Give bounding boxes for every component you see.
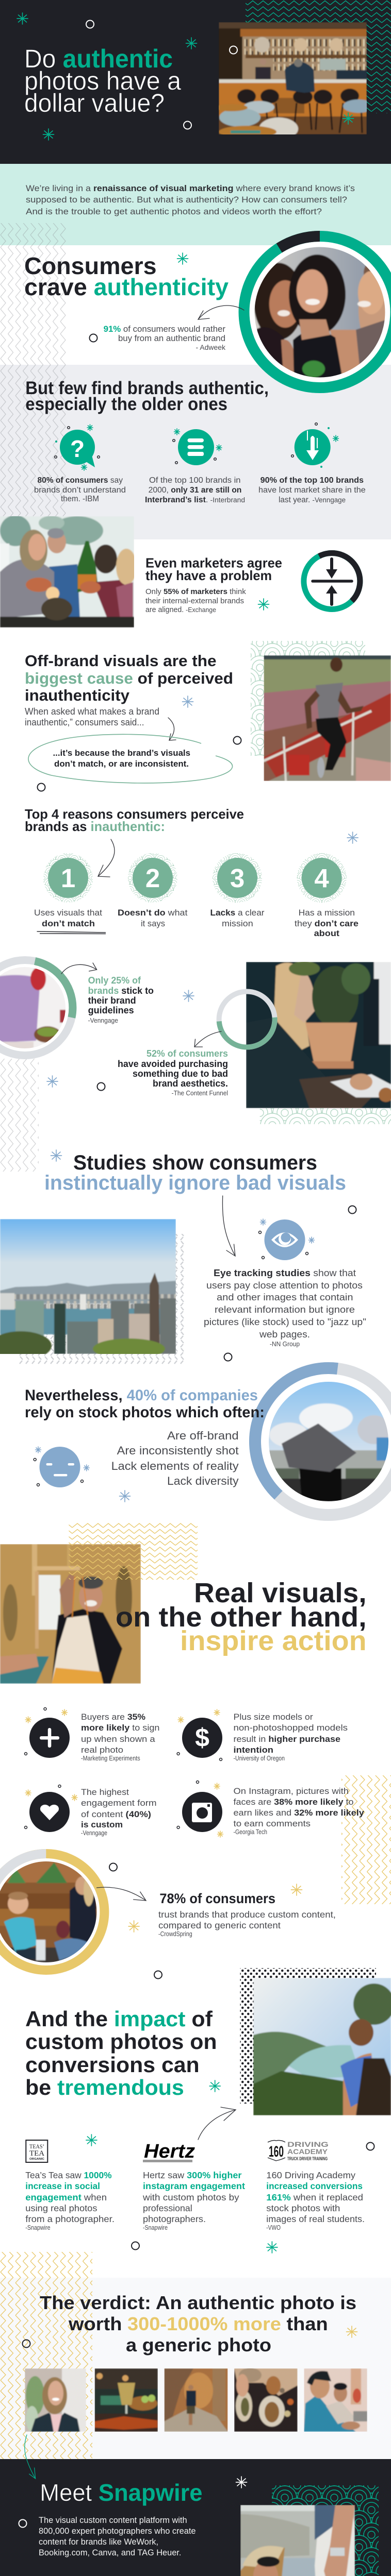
logo: 160 Driving Academy (268, 2140, 329, 2161)
icon: blue asterisk (183, 696, 193, 707)
icon: rings (37, 737, 241, 791)
stat: 90% of top brands: last year. -Venngage (279, 496, 346, 504)
stat: only 31 (145, 476, 245, 504)
photo: mother and son (0, 1860, 98, 1963)
list of stock photo problems (111, 1429, 239, 1487)
donut chart 25% with photo (0, 956, 76, 1059)
reason 4: about (314, 929, 340, 938)
gray section background (0, 365, 391, 539)
heading: Off-brand visuals are the (25, 652, 217, 670)
photo: person with umbrella (268, 1381, 390, 1502)
photo: purple smoothie (0, 963, 67, 1051)
heading: they have a problem (145, 568, 272, 583)
callout: hand-drawn ellipse: don’t match, or are inconsistent. (54, 759, 189, 769)
photo: tacos on table (234, 2368, 298, 2432)
case: Hertz: photographers. (143, 2214, 206, 2224)
eye tracking text: users pay close attention to photos (206, 1280, 363, 1291)
list of stock photo problems: Are off-brand (167, 1429, 239, 1442)
heading (40, 2292, 356, 2355)
stat: 80% of consumers (34, 476, 126, 503)
heading: inspire action (180, 1625, 367, 1656)
stat: faces on Instagram: to earn comments (233, 1819, 311, 1828)
reason 1: Uses visuals that (34, 908, 102, 918)
case: Hertz (142, 2170, 245, 2231)
callout: hand-drawn ellipse: ...it’s because the brand’s visuals (53, 748, 190, 758)
reason 2: Doesn’t do what (118, 908, 188, 918)
case: 160 Driving Academy: 160 Driving Academy (266, 2170, 355, 2180)
stat: 90% of top brands: have lost market share in the (258, 486, 366, 495)
icon: ring (90, 334, 97, 342)
case: Hertz: instagram engagement (143, 2181, 245, 2191)
heading: crave authenticity (24, 274, 229, 300)
donut chart 78% with photo (0, 1849, 109, 1975)
reason 2: it says (141, 919, 165, 928)
section: consumers crave authenticity (25, 231, 391, 393)
description text: Booking.com, Canva, and TAG Heuer. (39, 2548, 181, 2557)
case: 160 Driving Academy (266, 2170, 365, 2231)
case: Teas' Tea (25, 2170, 115, 2231)
zigzag pattern (69, 1522, 198, 1580)
heading: brands as inauthentic: (25, 819, 165, 834)
stat: only 31: Interbrand’s list. -Interbrand (145, 496, 245, 504)
icons: asterisk and ring (23, 2326, 357, 2347)
eye tracking text: relevant information but ignore (215, 1304, 355, 1315)
stat: 25% of brands: Only 25% of (88, 975, 141, 986)
logo: Teas' Tea (26, 2140, 47, 2162)
stat: 91%: 91% of consumers would rather (104, 324, 225, 334)
logo: 160 Driving Academy: 160 (269, 2143, 284, 2160)
reason 3: 3 (230, 863, 245, 893)
photo: hiker above bay (253, 1978, 391, 2115)
stat: 55% of marketers: their internal-external brands (145, 597, 244, 605)
icon: heart (25, 1785, 77, 1832)
case: 160 Driving Academy: images of real students. (266, 2214, 365, 2224)
stat: 55% of marketers: Only 55% of marketers think (145, 587, 246, 596)
heading: Top 4 reasons consumers perceive (25, 806, 244, 822)
section: 78% of consumers (0, 1844, 336, 1980)
heading: instinctually ignore bad visuals (44, 1172, 346, 1194)
stat: 78% of consumers: -CrowdSpring (158, 1930, 192, 1938)
photo: craftsman with apron (0, 1544, 141, 1684)
stat: only 31: Of the top 100 brands in (149, 476, 240, 485)
stat: 90% of top brands: 90% of the top 100 brands (260, 476, 364, 485)
logo: 160 Driving Academy: ACADEMY (287, 2147, 328, 2156)
heading: Studies show consumers (73, 1151, 317, 1174)
logo: 160 Driving Academy: TRUCK DRIVER TRAINING (287, 2156, 328, 2161)
section: real visuals (0, 1522, 391, 1904)
stat: 80% of consumers: them. -IBM (61, 495, 99, 503)
stat: plus size models: -University of Oregon (233, 1755, 285, 1762)
heading: The verdict: An authentic photo is (40, 2292, 356, 2313)
zigzag pattern (246, 0, 391, 113)
stat: 91% (104, 324, 226, 351)
eye tracking text: and other images that contain (217, 1292, 353, 1302)
heading: worth 300-1000% more than (68, 2313, 328, 2334)
stat: 35% more likely: up when shown a (81, 1734, 155, 1744)
heading: rely on stock photos which often: (25, 1404, 265, 1421)
stat: 55% of marketers: are aligned. -Exchange (145, 605, 216, 614)
icons: yellow asterisks (128, 1884, 302, 1932)
photo: businesswoman (25, 2368, 86, 2432)
icons: asterisks and rings (86, 2134, 374, 2253)
stripe pattern (18, 1234, 185, 1364)
stat: faces on Instagram (233, 1786, 364, 1836)
stat: custom content: is custom (81, 1820, 123, 1829)
stat: custom content: The highest (81, 1787, 129, 1797)
heading: custom photos on (25, 2029, 217, 2054)
stat: 52% of consumers: 52% of consumers (146, 1048, 228, 1059)
case: Teas' Tea: engagement when (25, 2192, 107, 2202)
section: marketers problem (0, 515, 370, 628)
icons: asterisks and ring (47, 990, 194, 1090)
icon: teal asterisk (209, 2080, 220, 2092)
arrow (198, 306, 244, 319)
arrow (168, 718, 176, 740)
eye tracking text: -NN Group (270, 1340, 300, 1348)
stat: 91%: - Adweek (196, 343, 226, 351)
stat: 35% more likely: real photo (81, 1745, 123, 1755)
section: intro (0, 164, 391, 245)
stat: 25% of brands: their brand (88, 995, 136, 1006)
icon: teal asterisk (177, 253, 188, 264)
reason 4: Has a mission (299, 908, 355, 918)
case: 160 Driving Academy: stock photos with (266, 2203, 340, 2213)
stat: 90% of top brands (258, 476, 366, 504)
case: Teas' Tea: from a photographer. (25, 2214, 115, 2224)
arrow (61, 963, 97, 974)
stat: 52% of consumers: brand aesthetics. (153, 1078, 228, 1089)
heading (25, 806, 244, 834)
donut chart 52% (217, 990, 276, 1049)
stat: 25% of brands: brands stick to (88, 986, 154, 996)
logo: Teas' Tea: TEA (29, 2149, 44, 2158)
photo: three smiling women (253, 245, 391, 381)
heading (25, 378, 269, 414)
photo: runner on stadium stairs (264, 655, 391, 781)
eye tracking text (204, 1268, 366, 1348)
heading (25, 2007, 217, 2099)
description text: content for brands like WeWork, (39, 2537, 158, 2547)
reason 1: don’t match (42, 919, 95, 928)
intro text: We’re living in a renaissance of visual marketing where every brand knows it’s (26, 183, 355, 193)
case: Teas' Tea: using real photos (25, 2203, 97, 2213)
heading: Consumers (24, 252, 157, 279)
callout: hand-drawn ellipse (28, 734, 233, 783)
description text: 800,000 expert photographers who create (39, 2526, 196, 2536)
icon: blue asterisk (120, 1490, 130, 1502)
heading: conversions can (25, 2053, 200, 2077)
icon: speech bubble question (55, 425, 100, 470)
reason 3: mission (222, 919, 253, 928)
scallop pattern (260, 1108, 391, 1124)
heading: But few find brands authentic, (25, 378, 269, 398)
heading: especially the older ones (25, 394, 227, 414)
case: 160 Driving Academy: 161% when it replaced (266, 2192, 363, 2202)
donut chart 40% with photo (249, 1362, 391, 1521)
heading (25, 1387, 265, 1421)
intro text: And is the trouble to get authentic photos and videos worth the effort? (26, 207, 322, 216)
reason 1 (34, 853, 106, 934)
icon: instagram (177, 1781, 223, 1837)
scallop pattern (272, 2485, 379, 2576)
stat: 35% more likely: more likely to sign (81, 1723, 159, 1733)
section: hero (0, 0, 391, 164)
photo: friends with sparklers (0, 515, 137, 628)
case: Hertz: professional (143, 2203, 192, 2213)
arrow (25, 2435, 36, 2479)
donut chart 55% with arrows (294, 544, 370, 619)
heading: Real visuals, (194, 1578, 367, 1608)
heading: biggest cause of perceived (25, 669, 233, 687)
icon: plus (25, 1707, 70, 1758)
title: Do authentic (24, 44, 173, 73)
logo: 160 Driving Academy: DRIVING (287, 2140, 329, 2148)
photo: woman with hat and basket (240, 2505, 355, 2576)
heading: on the other hand, (116, 1602, 367, 1633)
stat: only 31: 2000, only 31 are still on (149, 486, 241, 495)
stat: 52% of consumers (118, 1048, 228, 1097)
zigzag pattern (0, 1059, 39, 1172)
case: Teas' Tea: -Snapwire (25, 2224, 51, 2231)
reason 2 (118, 853, 188, 928)
arrow (194, 1031, 221, 1047)
stat: 78% of consumers: 78% of consumers (159, 1891, 275, 1906)
stat: 52% of consumers: something due to bad (133, 1069, 228, 1079)
stat: 55% of marketers (145, 587, 246, 614)
reason 4 (295, 853, 359, 938)
stat: custom content: engagement form (81, 1798, 157, 1808)
stat: plus size models (233, 1712, 348, 1762)
case: Hertz: with custom photos by (142, 2192, 239, 2202)
photo: woman with plant (246, 961, 391, 1108)
stat: 80% of consumers: 80% of consumers say (37, 476, 123, 485)
logo: Hertz: Hertz (144, 2141, 195, 2162)
stat: 52% of consumers: -The Content Funnel (172, 1089, 228, 1097)
reason 3: Lacks a clear (210, 908, 265, 918)
case: Hertz: -Snapwire (143, 2224, 168, 2231)
dot pattern (240, 1968, 376, 2104)
stat: 52% of consumers: have avoided purchasing (118, 1059, 228, 1069)
case: Teas' Tea: increase in social (25, 2181, 100, 2191)
reason 3 (210, 853, 265, 928)
photo: bar interior (219, 22, 367, 134)
heading: Nevertheless, 40% of companies (25, 1387, 258, 1404)
reason 2: 2 (145, 863, 160, 893)
section: impact on conversions (25, 1968, 391, 2253)
stat: 25% of brands: guidelines (88, 1005, 134, 1015)
stat: 80% of consumers: brands don’t understand (34, 486, 126, 495)
icon: rings (224, 1206, 356, 1361)
eye tracking text: Eye tracking studies show that (214, 1268, 356, 1278)
arrow (222, 1196, 235, 1256)
heading (145, 555, 282, 583)
photo: men at laptops (304, 2368, 367, 2432)
section: meet Snapwire (0, 2435, 391, 2576)
title (24, 44, 181, 117)
section: stock photos (25, 1338, 391, 1545)
heading (24, 252, 229, 300)
stat: 78% of consumers: compared to generic content (158, 1920, 281, 1930)
section: off-brand visuals (25, 641, 391, 791)
photo: harbour skyline (0, 1219, 176, 1360)
list of stock photo problems: Are inconsistently shot (117, 1444, 239, 1457)
stat: 78% of consumers (158, 1891, 336, 1938)
stat: 78% of consumers: trust brands that produce custom content, (158, 1909, 336, 1920)
left zigzag pattern (0, 223, 67, 516)
case: Teas' Tea: Tea’s Tea saw 1000% (25, 2170, 112, 2180)
case: 160 Driving Academy: -VWO (266, 2224, 281, 2231)
stat: 35% more likely: -Marketing Experiments (81, 1755, 140, 1762)
stat: 91%: buy from an authentic brand (118, 333, 225, 343)
stat: faces on Instagram: On Instagram, pictures with (233, 1786, 349, 1796)
section: verdict (0, 2252, 391, 2459)
scallop pattern (251, 641, 365, 756)
heading: a generic photo (126, 2334, 271, 2355)
icon: neutral face (34, 1447, 89, 1487)
heading: Even marketers agree (145, 555, 282, 571)
stat: 35% more likely: Buyers are 35% (81, 1712, 145, 1722)
stat: plus size models: non-photoshopped models (233, 1723, 348, 1733)
photo: drink with chilies (94, 2368, 158, 2432)
heading: Meet Snapwire (40, 2479, 203, 2506)
case: Hertz: Hertz saw 300% higher (143, 2170, 242, 2180)
logo: Teas' Tea: ORGANIC (29, 2158, 44, 2161)
stat: plus size models: Plus size models or (233, 1712, 313, 1722)
icon: speech bubble question: ? (70, 435, 85, 462)
stat: 35% more likely (81, 1712, 159, 1762)
intro sentence (25, 706, 159, 727)
icon: rings (109, 1863, 162, 1978)
section: studies (0, 1150, 366, 1364)
stat: plus size models: intention (233, 1745, 273, 1755)
icon: blue asterisk (51, 1150, 62, 1161)
list of stock photo problems: Lack diversity (167, 1475, 239, 1487)
icon: dollar (177, 1709, 222, 1761)
logo: Teas' Tea: TEAS’ (29, 2143, 44, 2150)
icon: list bars (173, 429, 222, 465)
list of stock photo problems: Lack elements of reality (111, 1460, 239, 1472)
reason 1: 1 (61, 863, 75, 893)
stat: 25% of brands: -Venngage (88, 1016, 118, 1024)
arrow (98, 839, 115, 877)
arrow (97, 1887, 146, 1901)
stat: faces on Instagram: -Georgia Tech (233, 1828, 267, 1836)
heading: And the impact of (25, 2007, 213, 2031)
case: 160 Driving Academy: increased conversions (266, 2181, 363, 2191)
heading: be tremendous (25, 2075, 184, 2099)
stat: faces on Instagram: earn likes and 32% more likely (233, 1808, 364, 1818)
photo: stone arches walker (164, 2368, 228, 2432)
decorative asterisks and rings (17, 13, 354, 140)
stat: faces on Instagram: faces are 38% more likely to (233, 1797, 354, 1807)
title: photos have a (24, 66, 181, 95)
icon: teal asterisk (258, 599, 269, 610)
stat: custom content: -Venngage (81, 1829, 107, 1837)
arrow (198, 2107, 236, 2140)
icons: asterisks and rings (19, 2477, 247, 2576)
eye tracking text: pictures (like stock) used to "jazz up" (204, 1317, 366, 1327)
heading (25, 652, 233, 704)
reason 4: 4 (314, 863, 329, 893)
intro sentence: When asked what makes a brand (25, 706, 159, 717)
stat: 25% of brands (88, 975, 154, 1024)
heading (116, 1578, 367, 1656)
intro text (26, 183, 355, 216)
stat: custom content: of content (40%) (81, 1809, 151, 1819)
description text (39, 2515, 196, 2557)
section: top 4 reasons (25, 806, 359, 938)
description text: The visual custom content platform with (39, 2515, 187, 2525)
heading (44, 1151, 346, 1194)
section: brand guidelines stats (0, 951, 391, 1172)
donut chart 91% with photo (238, 231, 391, 393)
eye tracking text: web pages. (259, 1329, 310, 1340)
reason 4: they don’t care (295, 919, 359, 928)
stat: custom content (81, 1787, 157, 1837)
icon: dollar: $ (195, 1723, 209, 1752)
intro sentence: inauthentic,” consumers said... (25, 717, 144, 727)
stat: plus size models: result in higher purchase (233, 1734, 340, 1744)
title: dollar value? (24, 89, 165, 117)
icon: eye (259, 1219, 315, 1260)
zigzag pattern (0, 2252, 92, 2459)
icon: falling arrow (291, 423, 338, 468)
right zigzag pattern (341, 1775, 391, 1904)
heading: inauthenticity (25, 686, 130, 704)
section: few find brands authentic (25, 378, 366, 504)
icon: blue asterisk (347, 832, 358, 843)
intro text: supposed to be authentic. But what is authenticity? How can consumers tell? (26, 195, 347, 205)
